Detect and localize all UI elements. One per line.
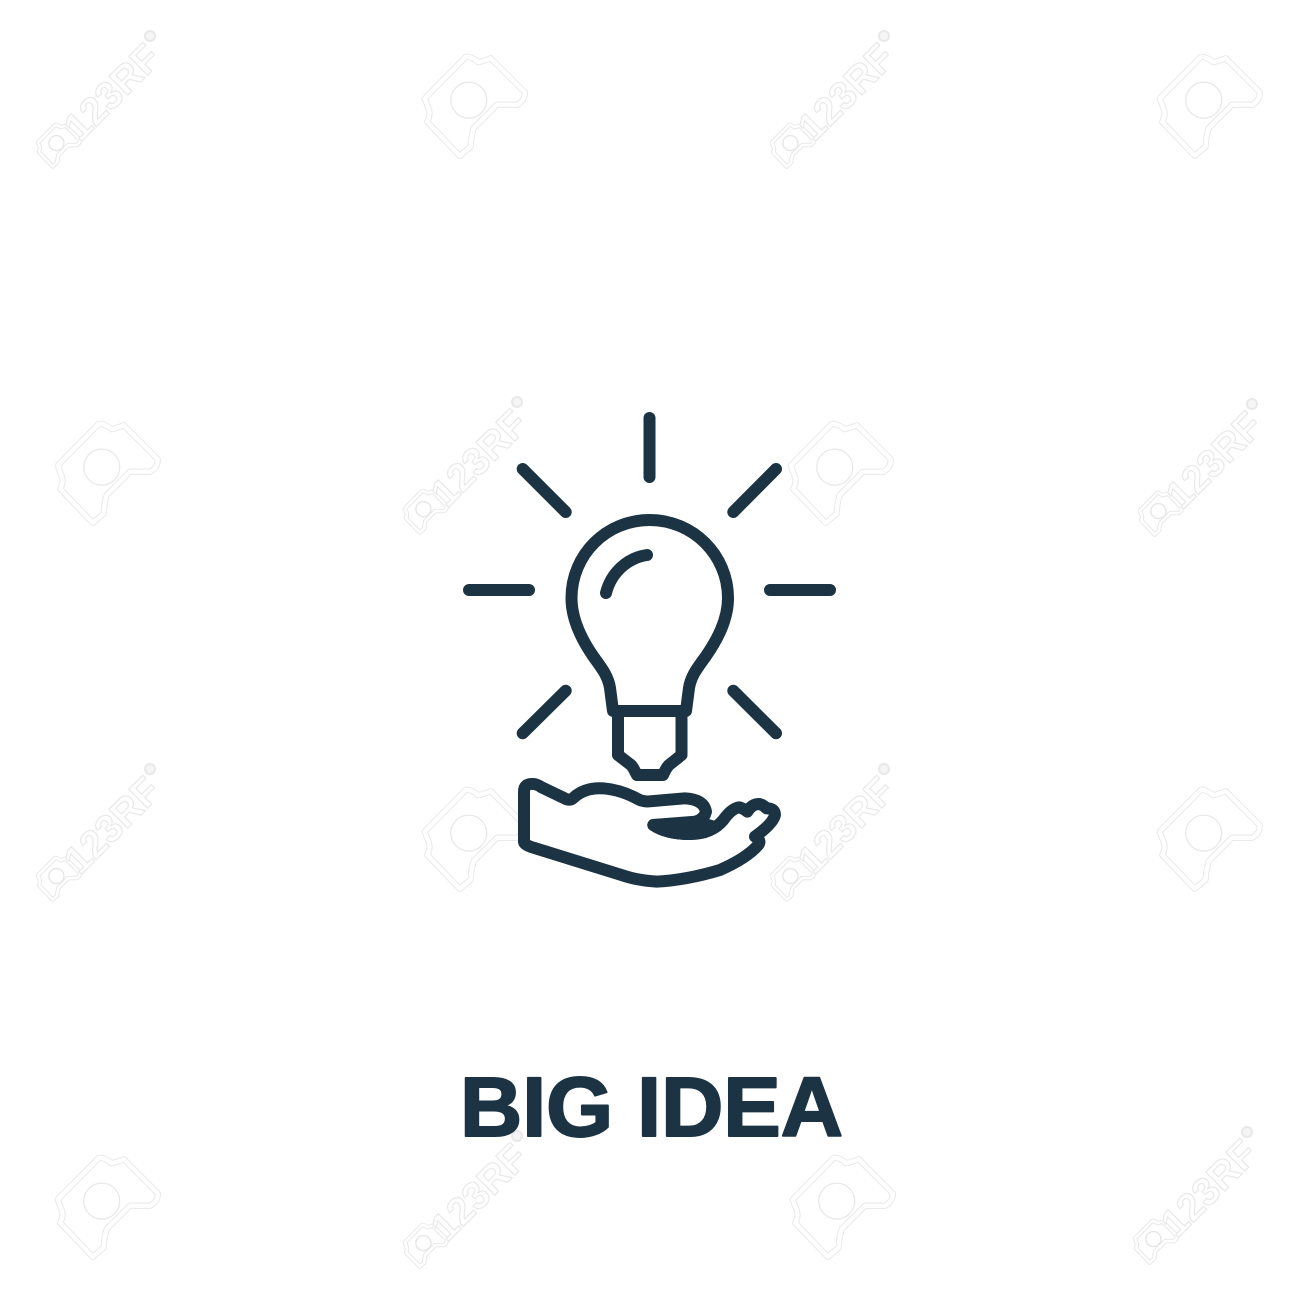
watermark: 123RF middle centre: 123RF [423, 402, 536, 515]
icon: bulb highlight [606, 555, 647, 593]
watermark: 123RF lower left: 123RF [56, 769, 169, 882]
watermark: 123RF top centre: 123RF [790, 36, 903, 149]
icon: bulb base [618, 711, 682, 775]
icon: light bulb glass [572, 520, 728, 711]
watermark: 123RF middle right: 123RF [1158, 404, 1271, 517]
watermark: 123RF top left: 123RF [56, 36, 169, 149]
icon: big idea [469, 418, 830, 882]
icon: light rays [469, 418, 830, 733]
watermark: 123RF lower centre: 123RF [790, 769, 903, 882]
icon: open hand [524, 784, 775, 882]
watermark: 123RF bottom right: 123RF [1153, 1132, 1266, 1245]
title: BIG IDEA [460, 1060, 843, 1154]
watermark: 123RF bottom centre: 123RF [423, 1136, 536, 1249]
